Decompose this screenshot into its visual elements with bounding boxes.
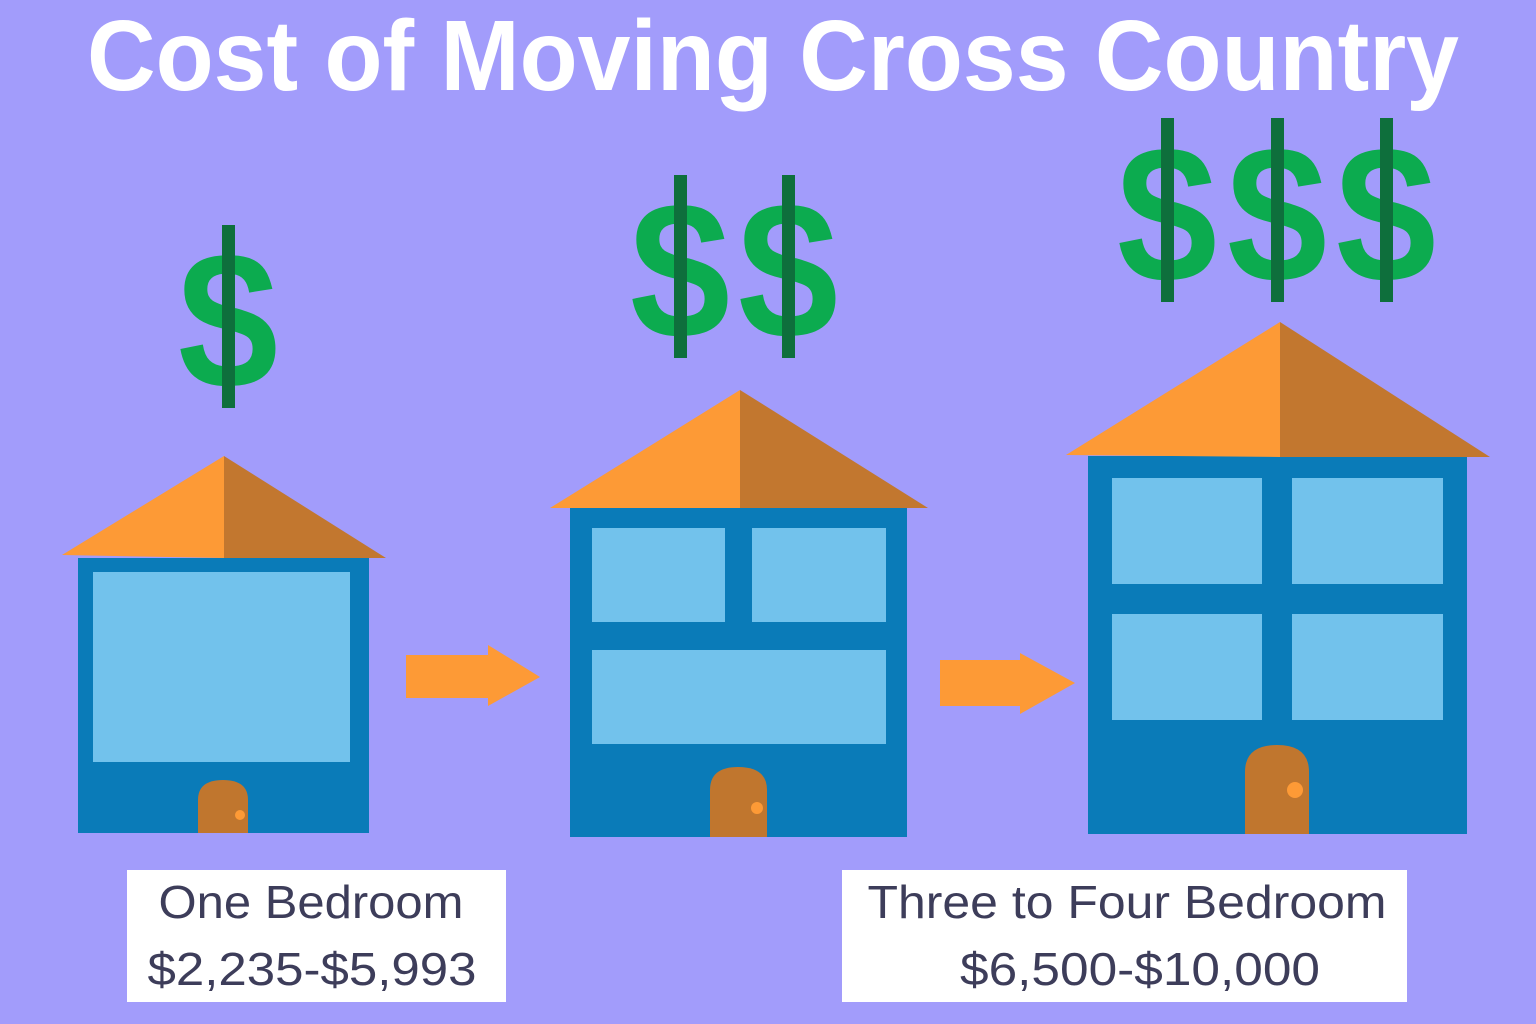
label: one bedroom: $2,235-$5,993 bbox=[148, 943, 476, 995]
label: one bedroom bbox=[127, 870, 506, 1002]
dollar signs: two: $ bbox=[738, 161, 838, 380]
label: one bedroom: One Bedroom bbox=[158, 876, 464, 928]
dollar sign: one: $ bbox=[178, 211, 278, 430]
house: one bedroom bbox=[62, 456, 386, 833]
title: Cost of Moving Cross Country bbox=[87, 0, 1459, 112]
house: two bedroom bbox=[550, 390, 928, 837]
dollar signs: three bbox=[1117, 105, 1436, 324]
arrow 1 bbox=[406, 645, 540, 706]
label: three to four bedroom: Three to Four Bedroom bbox=[868, 876, 1386, 928]
dollar signs: three: $ bbox=[1227, 105, 1327, 324]
dollar signs: three: $ bbox=[1117, 105, 1217, 324]
label: three to four bedroom bbox=[842, 870, 1407, 1002]
dollar signs: three: $ bbox=[1336, 105, 1436, 324]
dollar signs: two bbox=[630, 161, 838, 380]
house: three to four bedroom bbox=[1066, 322, 1490, 834]
label: three to four bedroom: $6,500-$10,000 bbox=[960, 943, 1320, 995]
arrow 2 bbox=[940, 653, 1075, 714]
dollar signs: two: $ bbox=[630, 161, 730, 380]
